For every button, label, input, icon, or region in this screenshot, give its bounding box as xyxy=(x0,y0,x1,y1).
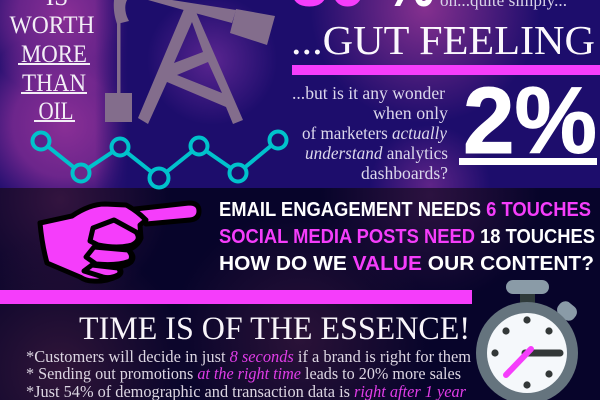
text: analytics question: of marketers actually xyxy=(302,123,447,143)
text: time facts xyxy=(26,347,471,400)
stat: two percent: 2% xyxy=(463,68,597,174)
text: analytics question: ...but is it any wonder xyxy=(292,83,445,103)
heading: is worth more than oil xyxy=(10,0,94,125)
heading: is worth more than oil: THAN xyxy=(22,70,86,97)
text: touches list: EMAIL ENGAGEMENT NEEDS 6 TOUCHES xyxy=(219,199,591,221)
panel: top background xyxy=(0,0,600,188)
icon: oil pumpjack xyxy=(105,0,275,124)
text: analytics question: understand analytics xyxy=(305,143,448,163)
heading: is worth more than oil: WORTH xyxy=(10,12,94,39)
text: analytics question: when only xyxy=(373,103,448,123)
text: time facts: * Sending out promotions at the right time leads to 20% more sales xyxy=(26,364,461,383)
panel: bottom background xyxy=(0,188,600,400)
pink divider top xyxy=(292,65,600,75)
heading: time is of the essence: TIME IS OF THE ESSENCE! xyxy=(79,311,470,347)
heading: is worth more than oil: MORE xyxy=(21,41,87,68)
text: touches list: SOCIAL MEDIA POSTS NEED 18 TOUCHES xyxy=(219,226,595,248)
text: analytics question xyxy=(292,83,448,183)
line chart: teal zigzag xyxy=(32,132,286,188)
stat: top percentage xyxy=(290,0,435,22)
text: touches list: HOW DO WE VALUE OUR CONTENT? xyxy=(219,253,594,275)
icon: pointing hand xyxy=(40,203,199,281)
heading: gut feeling: ...GUT FEELING xyxy=(291,17,595,63)
text: time facts: *Customers will decide in just 8 seconds if a brand is right for them xyxy=(26,347,471,366)
icon: stopwatch xyxy=(476,280,580,400)
pink divider bottom xyxy=(0,290,472,304)
text: analytics question: dashboards? xyxy=(361,163,448,183)
heading: is worth more than oil: OIL xyxy=(38,98,74,125)
text: touches list xyxy=(219,199,595,275)
